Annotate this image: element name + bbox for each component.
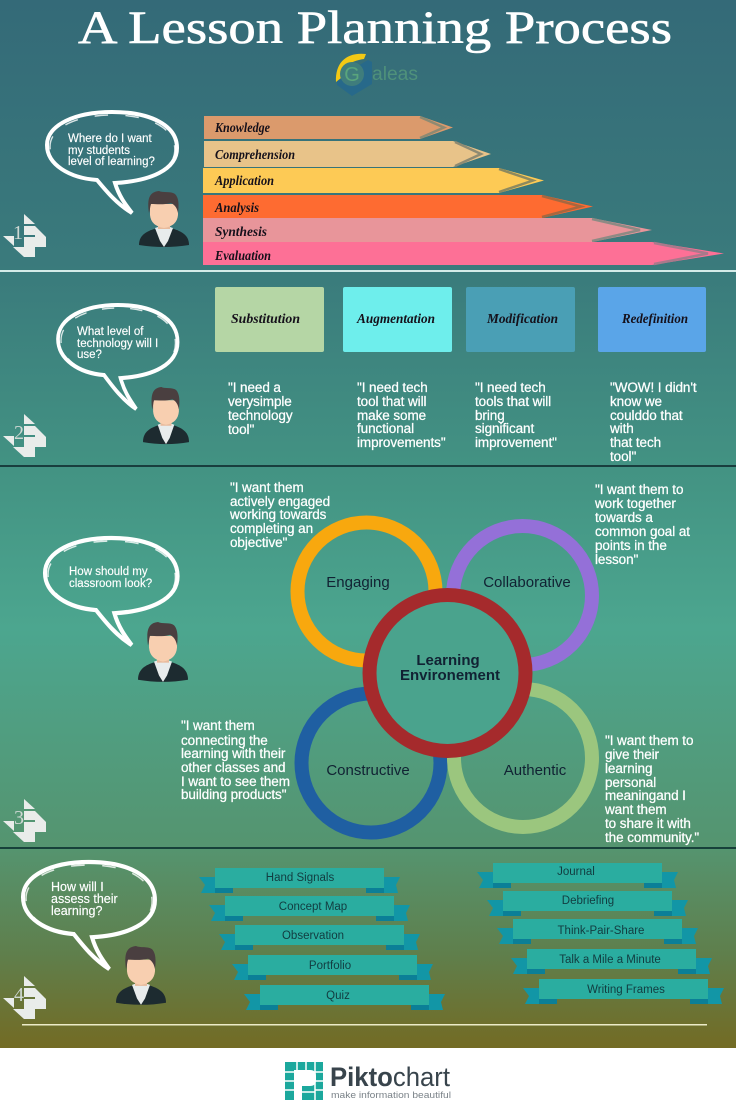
SAMR box: Modification: Modification [486,312,558,327]
section 1: speech bubble: Where do I want [68,133,153,145]
ring: Learning Environement centre: Environement [400,667,500,684]
section 3: speech bubble [45,538,178,645]
ribbon list: right column [477,863,724,1004]
section 3: number badge: 3 [14,807,24,829]
tagline: make information beautiful [331,1090,451,1101]
quote: augmentation: make some [357,408,426,423]
arrow: Analysis [203,195,593,218]
ribbon: Think-Pair-Share: Think-Pair-Share [558,925,644,937]
section 2: person icon [143,387,189,444]
quote: modification: significant [475,421,534,436]
arrow: Application: Application [214,174,274,189]
SAMR box: Substitution: Substitution [231,312,300,327]
ribbon: Debriefing: Debriefing [562,895,614,907]
section 2: number badge [3,414,46,457]
quote: substitution: verysimple [228,394,292,409]
ribbon: Hand Signals: Hand Signals [266,872,334,884]
logo: Galeas: aleas [372,64,418,85]
quote: authentic: give their [605,747,660,762]
section 3: speech bubble: classroom look? [69,578,152,590]
quote: augmentation: improvements" [357,435,446,450]
logo: Galeas: G [344,64,360,86]
quote: substitution: "I need a [228,380,281,395]
quote: augmentation: "I need tech [357,380,428,395]
ring: Engaging [298,522,436,660]
section 4: person icon [116,946,166,1005]
quote: collaborative: common goal at [595,524,690,539]
section 3: person icon [138,622,188,682]
quote: augmentation: tool that will [357,394,426,409]
quote: modification [475,380,557,450]
section 1: speech bubble: my students [68,145,130,157]
section 4: speech bubble: assess their [51,892,118,906]
ribbon: Concept Map: Concept Map [279,901,347,913]
SAMR box: Augmentation: Augmentation [356,312,435,327]
Piktochart logo [285,1062,451,1101]
quote: constructive [181,718,290,802]
section 3: speech bubble: How should my [69,566,148,578]
ribbon: Quiz: Quiz [326,990,350,1002]
logo: Galeas [336,54,418,96]
section 2: number badge: 2 [14,422,24,444]
quote: modification: bring [475,408,505,423]
quote: substitution [228,380,293,437]
quote: authentic: "I want them to [605,733,693,748]
ring: Learning Environement centre [370,595,526,751]
quote: authentic: learning [605,761,652,776]
ribbon: Talk a Mile a Minute [511,949,712,974]
title: A Lesson Planning Process [78,2,672,54]
quote: authentic: the community." [605,830,699,845]
quote: engaging: actively engaged [230,494,330,509]
SAMR box: Modification [466,287,575,352]
quote: collaborative: work together [594,496,676,511]
quote: redefinition: that tech [610,435,661,450]
wordmark: Piktochart [330,1062,450,1092]
ring: Authentic [454,689,592,827]
ring: Authentic: Authentic [504,762,567,779]
ribbon: Portfolio [232,955,433,980]
ribbon: Observation [219,925,420,950]
icon: Piktochart mark [285,1062,323,1100]
SAMR box: Substitution [215,287,324,352]
quote: redefinition: with [609,421,634,436]
ribbon: Journal: Journal [557,866,595,878]
arrow: Knowledge: Knowledge [214,121,270,136]
ribbon: Think-Pair-Share [497,919,698,944]
section 4: speech bubble: learning? [51,904,102,918]
quote: redefinition: tool" [610,449,636,464]
footer panel [0,1048,736,1115]
quote: authentic [604,733,699,845]
section 2: speech bubble [58,305,178,409]
ribbon: Talk a Mile a Minute: Talk a Mile a Minute [559,954,661,966]
quote: augmentation: functional [357,421,414,436]
ring: Collaborative: Collaborative [483,574,571,591]
section 1: speech bubble [47,112,177,213]
quote: constructive: connecting the [181,733,268,748]
pyramid of Bloom arrows [203,116,724,265]
ribbon: Writing Frames [523,979,724,1004]
arrow: Knowledge [204,116,453,139]
arrow: Synthesis [203,218,652,242]
arrow: Analysis: Analysis [214,201,259,216]
ribbon: Quiz [244,985,445,1010]
quote: constructive: other classes and [181,760,285,775]
ring: Engaging: Engaging [326,574,390,591]
section 1: person icon [139,191,189,247]
section 2: speech bubble: technology will I [77,338,158,350]
quote: collaborative [594,482,690,567]
ribbon: Portfolio: Portfolio [309,960,351,972]
section 4: number badge [3,976,46,1019]
ring: Collaborative [453,526,592,665]
quote: substitution: tool" [228,422,254,437]
quote: constructive: building products" [181,787,287,802]
section 1: number badge: 1 [13,222,23,244]
quote: engaging: completing an [230,521,313,536]
quote: engaging: working towards [229,507,327,522]
section 4: speech bubble: How will I [51,880,104,894]
ribbon: Debriefing [487,891,688,916]
quote: substitution: technology [228,408,293,423]
section 4: speech bubble [23,862,155,969]
quote: authentic: meaningand I [605,788,686,803]
section 1: number badge [3,214,46,257]
quote: collaborative: "I want them to [595,482,683,497]
ribbon: Journal [477,863,678,888]
SAMR box: Redefinition: Redefinition [621,312,688,327]
section 4: number badge: 4 [14,984,24,1006]
quote: authentic: to share it with [605,816,691,831]
divider lines [0,270,736,1026]
ring: Constructive [302,694,440,832]
quote: redefinition: coulddo that [610,408,683,423]
quote: constructive: I want to see them [181,774,290,789]
quote: augmentation [357,380,446,450]
quote: collaborative: lesson" [595,552,639,567]
arrow: Application [203,168,544,193]
quote: engaging [229,480,330,550]
quote: modification: "I need tech [475,380,546,395]
section 3: number badge [3,799,46,842]
ribbon: Concept Map [209,896,410,921]
arrow: Synthesis: Synthesis [215,225,268,240]
ribbon: Writing Frames: Writing Frames [587,984,665,996]
quote: modification: improvement" [475,435,557,450]
section 2: speech bubble: What level of [77,326,144,338]
quote: redefinition: know we [610,394,662,409]
quote: collaborative: towards a [595,510,653,525]
quote: engaging: objective" [230,535,288,550]
ribbon list: left column [199,868,445,1010]
ring: Constructive: Constructive [326,762,410,779]
quote: engaging: "I want them [230,480,304,495]
arrow: Comprehension [204,141,491,167]
learning environment ring diagram [298,522,592,832]
quote: redefinition [609,380,697,464]
SAMR box: Augmentation [343,287,452,352]
quote: authentic: personal [605,775,656,790]
SAMR box: Redefinition [598,287,706,352]
quote: modification: tools that will [475,394,551,409]
arrow: Comprehension: Comprehension [215,148,295,163]
quote: authentic: want them [604,802,667,817]
quote: constructive: "I want them [181,718,255,733]
quote: collaborative: points in the [595,538,667,553]
quote: redefinition: "WOW! I didn't [610,380,697,395]
ribbon: Hand Signals [199,868,400,893]
arrow: Evaluation [203,242,724,265]
ring: Learning Environement centre: Learning [416,652,480,669]
section 2: speech bubble: use? [77,349,102,361]
ribbon: Observation: Observation [282,930,344,942]
quote: constructive: learning with their [181,746,286,761]
arrow: Evaluation: Evaluation [214,249,271,264]
section 1: speech bubble: level of learning? [68,156,155,168]
